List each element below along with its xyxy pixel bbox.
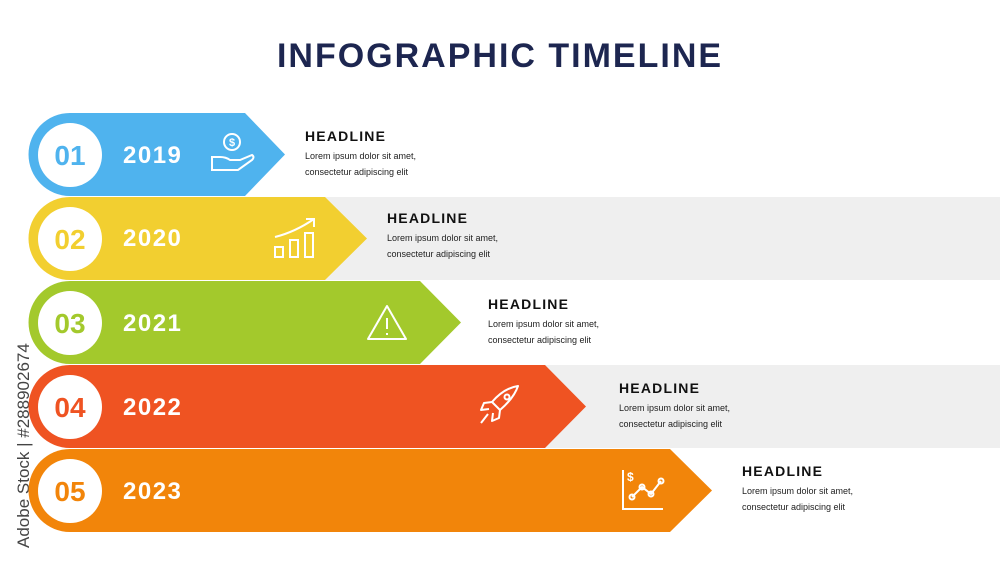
row 1: 01	[54, 140, 86, 171]
row 5: Lorem ipsum dolor sit amet,	[742, 486, 853, 496]
headline 3: HEADLINE	[488, 296, 569, 312]
icon: money hand	[212, 134, 254, 170]
row 3: Lorem ipsum dolor sit amet,	[488, 319, 599, 329]
icon: rocket	[481, 386, 518, 423]
icon: warning	[368, 306, 406, 339]
row 1: Lorem ipsum dolor sit amet,	[305, 151, 416, 161]
row 2: 02	[54, 224, 86, 255]
row 1: $	[229, 137, 235, 149]
row 3: 2021	[123, 310, 182, 337]
row 3	[29, 281, 599, 364]
row 2: Lorem ipsum dolor sit amet,	[387, 233, 498, 243]
row 4: consectetur adipiscing elit	[619, 419, 723, 429]
headline 2: HEADLINE	[387, 210, 468, 226]
watermark: Adobe Stock | #288902674	[14, 343, 33, 548]
row 2: 2020	[123, 225, 182, 252]
headline 1: HEADLINE	[305, 128, 386, 144]
row 1: consectetur adipiscing elit	[305, 167, 409, 177]
headline 4: HEADLINE	[619, 380, 700, 396]
headline 5: HEADLINE	[742, 463, 823, 479]
row 5: 2023	[123, 478, 182, 505]
row 5: 05	[54, 476, 86, 507]
row 2	[28, 197, 498, 280]
row 4: 2022	[123, 394, 182, 421]
row 2: consectetur adipiscing elit	[387, 249, 491, 259]
row 1	[29, 113, 416, 196]
gray band row 2	[300, 197, 1000, 280]
row 5: $	[627, 470, 634, 484]
title: INFOGRAPHIC TIMELINE	[277, 37, 723, 75]
row 5: consectetur adipiscing elit	[742, 502, 846, 512]
row 3: consectetur adipiscing elit	[488, 335, 592, 345]
icon: growth chart	[275, 219, 314, 257]
row 4: 04	[54, 392, 86, 423]
icon: chart dollar	[623, 470, 664, 509]
row 1: 2019	[123, 142, 182, 169]
gray band row 4	[500, 365, 1000, 448]
row 4: Lorem ipsum dolor sit amet,	[619, 403, 730, 413]
row 3: 03	[54, 308, 86, 339]
row 5	[28, 449, 853, 532]
row 4	[28, 365, 730, 448]
